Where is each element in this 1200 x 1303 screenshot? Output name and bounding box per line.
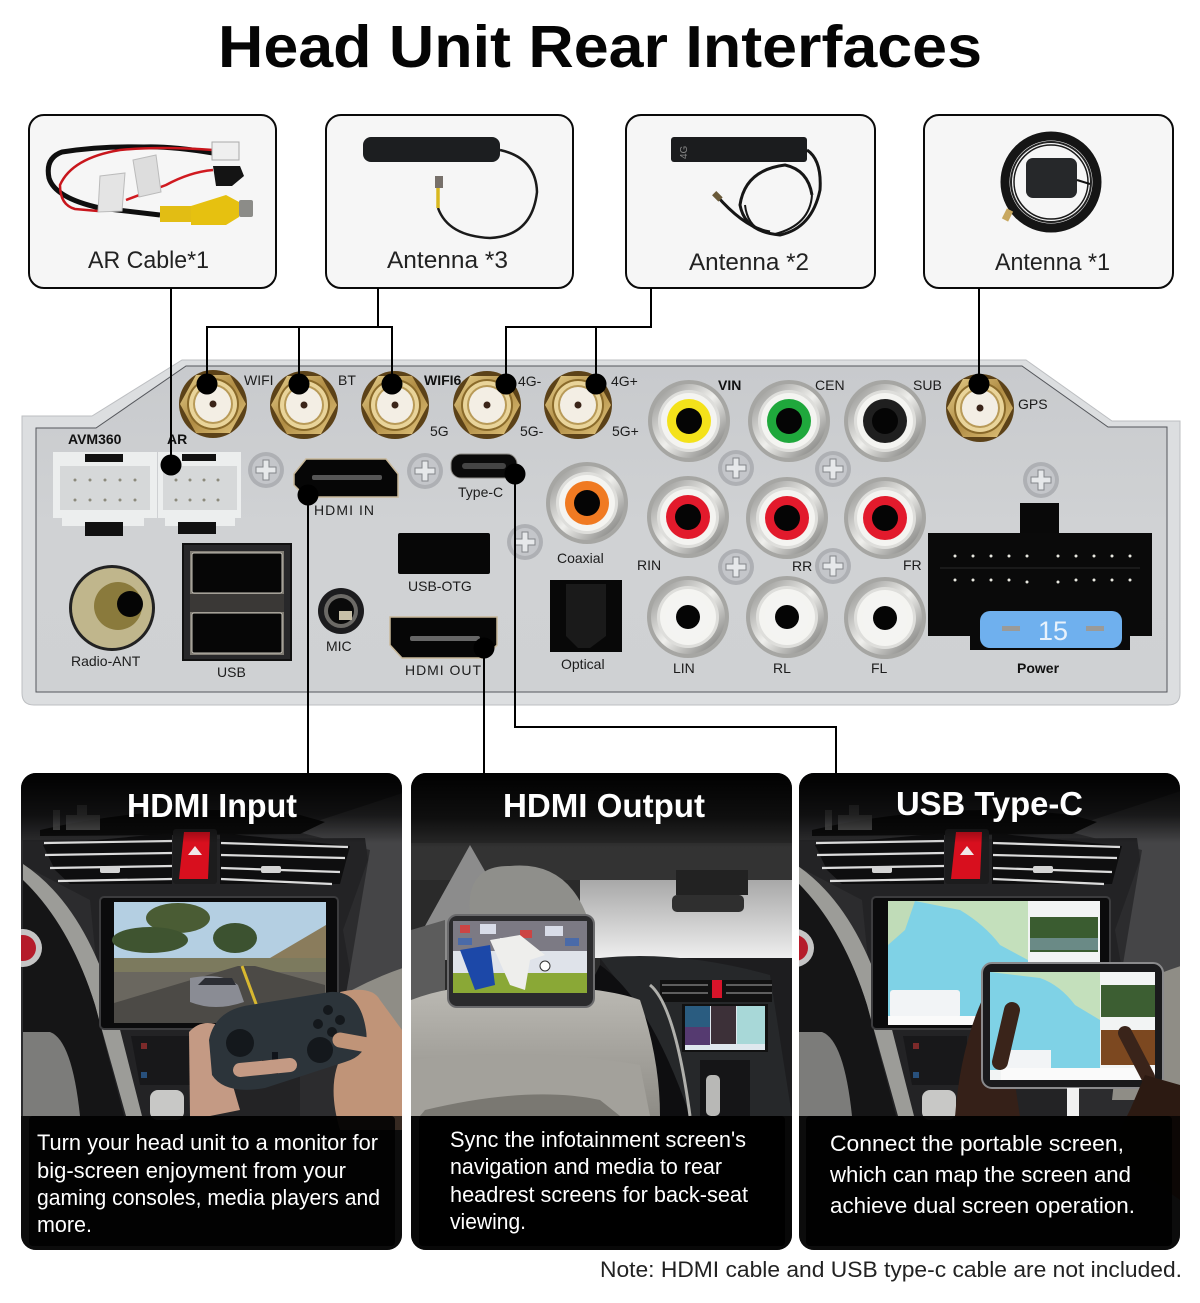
SMA antenna sockets	[179, 370, 1014, 442]
heading: HDMI Output	[503, 787, 705, 824]
heading: USB Type-C	[896, 785, 1083, 822]
AVM360 connector	[53, 452, 157, 536]
HDMI IN port	[294, 459, 398, 497]
icon: GPS antenna	[1005, 136, 1097, 228]
Type-C port	[451, 454, 517, 478]
icon: AR cable	[48, 142, 253, 225]
connector lines and dots	[160, 288, 990, 773]
panel: head unit rear plate	[22, 360, 1180, 705]
port labels: HDMI OUT	[405, 662, 481, 678]
port labels: Type-C	[458, 484, 503, 500]
port labels: 4G+	[611, 373, 638, 389]
label: Antenna *1: Antenna *1	[995, 249, 1110, 276]
caption box: Connect the portable screen,	[830, 1131, 1124, 1156]
port labels: LIN	[673, 660, 695, 676]
caption box	[419, 1116, 785, 1246]
caption box: Sync the infotainment screen's	[450, 1127, 746, 1152]
port labels: BT	[338, 372, 356, 388]
USB double port	[183, 544, 291, 660]
caption box: more.	[37, 1212, 92, 1237]
port labels: RR	[792, 558, 812, 574]
photo: dashboard with portable screen	[776, 773, 1185, 1250]
port labels: GPS	[1018, 396, 1048, 412]
photo: dashboard with game and controller	[4, 773, 413, 1250]
USB-OTG port	[398, 533, 490, 574]
panel: HDMI Input	[4, 773, 413, 1250]
port labels: Optical	[561, 656, 605, 672]
port labels: USB-OTG	[408, 578, 472, 594]
port labels	[68, 372, 1060, 680]
port labels: AVM360	[68, 431, 122, 447]
port labels: Coaxial	[557, 550, 604, 566]
port labels: 5G	[430, 423, 449, 439]
port labels: Radio-ANT	[71, 653, 141, 669]
port labels: VIN	[718, 377, 741, 393]
port labels: SUB	[913, 377, 942, 393]
icon: 4G antenna: 4G	[679, 145, 690, 159]
panel: AR cable accessory	[29, 115, 276, 288]
port labels: USB	[217, 664, 246, 680]
screws	[248, 450, 1059, 585]
label: AR Cable*1: AR Cable*1	[88, 247, 209, 274]
label: Antenna *2: Antenna *2	[689, 249, 809, 276]
panel: HDMI Output	[411, 773, 792, 1250]
Optical port	[550, 580, 622, 652]
caption box: which can map the screen and	[829, 1162, 1131, 1187]
port labels: FR	[903, 557, 922, 573]
Power connector and fuse: 15	[1038, 616, 1068, 646]
caption box: headrest screens for back-seat	[450, 1182, 748, 1207]
Radio antenna socket	[69, 565, 155, 651]
port labels: Power	[1017, 660, 1060, 676]
panel: antenna x3 accessory	[326, 115, 573, 288]
caption box: gaming consoles, media players and	[37, 1185, 380, 1210]
port labels: 4G-	[518, 373, 542, 389]
caption box: Turn your head unit to a monitor for	[37, 1130, 378, 1155]
icon: WiFi antenna	[363, 137, 537, 238]
port labels: FL	[871, 660, 888, 676]
icon: 4G antenna	[671, 137, 820, 235]
port labels: MIC	[326, 638, 352, 654]
port labels: WIFI	[244, 372, 274, 388]
heading: HDMI Input	[127, 787, 297, 824]
port labels: CEN	[815, 377, 845, 393]
Power connector and fuse	[928, 503, 1152, 650]
port labels: HDMI IN	[314, 502, 374, 518]
photo: rear seat headrest screen	[411, 773, 792, 1250]
port labels: WIFI6	[424, 372, 462, 388]
port labels: AR	[167, 431, 187, 447]
AR connector	[158, 452, 241, 534]
title: Head Unit Rear Interfaces	[218, 14, 982, 80]
caption box	[806, 1116, 1172, 1246]
footnote: Note: HDMI cable and USB type-c cable are not included.	[600, 1257, 1182, 1282]
port labels: 5G+	[612, 423, 639, 439]
panel: antenna x2 accessory	[626, 115, 875, 288]
caption box: navigation and media to rear	[450, 1154, 722, 1179]
caption box: viewing.	[450, 1209, 526, 1234]
port labels: RIN	[637, 557, 661, 573]
port labels: 5G-	[520, 423, 544, 439]
port labels: RL	[773, 660, 791, 676]
HDMI OUT port	[390, 617, 497, 658]
caption box: achieve dual screen operation.	[830, 1193, 1135, 1218]
caption box	[29, 1116, 395, 1246]
MIC jack	[318, 588, 364, 634]
label: Antenna *3: Antenna *3	[387, 247, 508, 274]
panel: antenna x1 accessory	[924, 115, 1173, 288]
panel: USB Type-C	[776, 773, 1185, 1250]
RCA sockets	[546, 380, 926, 659]
caption box: big-screen enjoyment from your	[37, 1158, 346, 1183]
